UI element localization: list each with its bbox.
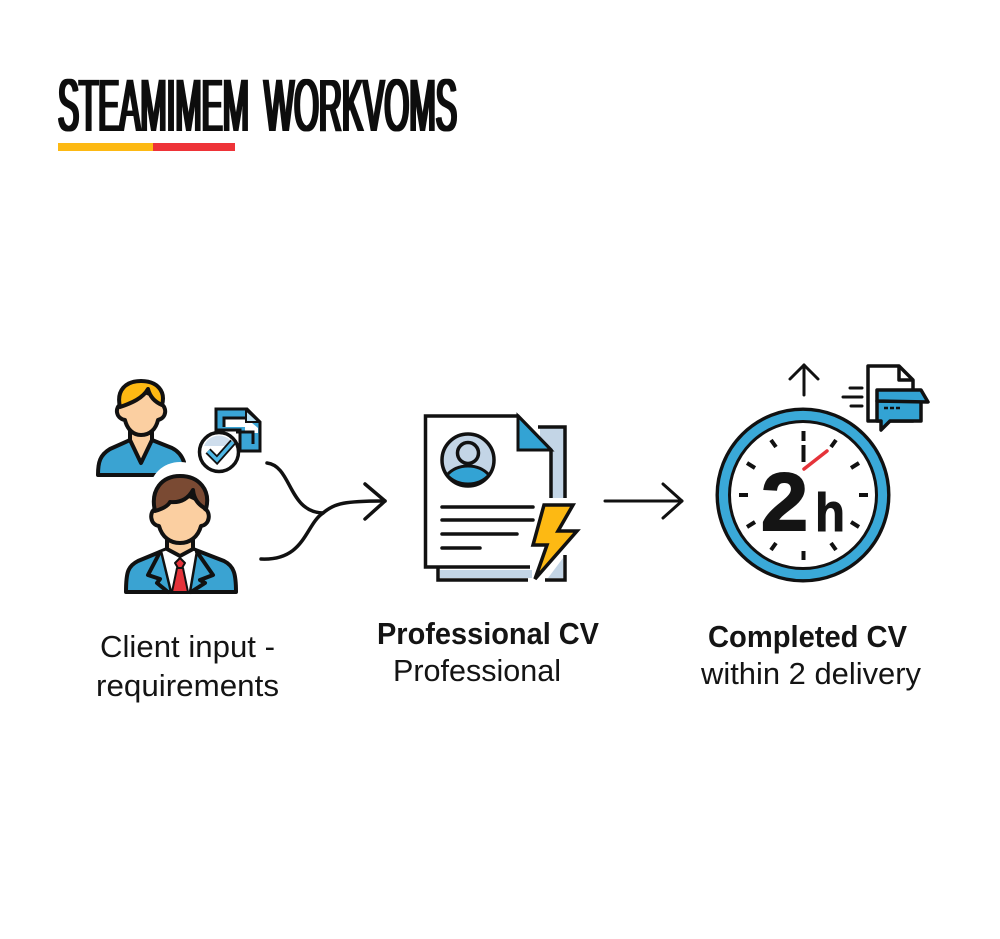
front page — [426, 416, 551, 567]
page fold — [518, 416, 551, 450]
arrow: CV to completed — [605, 484, 682, 518]
icon: manager person — [126, 476, 236, 592]
step 2: professional CV — [377, 416, 599, 688]
icon: up arrow — [790, 365, 818, 395]
step 1: client input — [96, 381, 279, 703]
caption: completed CV — [700, 619, 921, 691]
avatar — [442, 434, 494, 486]
title: STEAMIMEM — [58, 64, 249, 147]
clock hand — [804, 451, 827, 469]
text lines — [442, 507, 533, 548]
back page — [438, 427, 565, 580]
arrow: merging inputs to CV — [261, 463, 385, 559]
caption: client input — [96, 629, 279, 703]
caption: completed CV: Completed CV — [708, 619, 907, 654]
icon: document and message — [843, 366, 928, 430]
clock ticks — [739, 431, 868, 560]
icon: client person — [98, 381, 210, 518]
caption: professional CV — [377, 616, 599, 688]
title underline — [58, 143, 235, 151]
clock label: 2h — [761, 457, 845, 548]
caption: client input: Client input - — [100, 629, 275, 664]
caption: completed CV: within 2 delivery — [700, 656, 921, 691]
infographic canvas: WORKVOMS — [264, 64, 457, 147]
icon: document with check badge — [200, 409, 260, 472]
icon: clock — [717, 409, 889, 581]
clock label: 2h: h — [815, 483, 845, 543]
icon: CV document with lightning bolt — [426, 416, 577, 580]
icon: lightning bolt — [533, 505, 577, 579]
step 3: completed CV — [700, 365, 928, 691]
caption: professional CV: Professional CV — [377, 616, 599, 651]
clock label: 2h: 2 — [761, 457, 808, 548]
caption: professional CV: Professional — [393, 653, 561, 688]
caption: client input: requirements — [96, 668, 279, 703]
